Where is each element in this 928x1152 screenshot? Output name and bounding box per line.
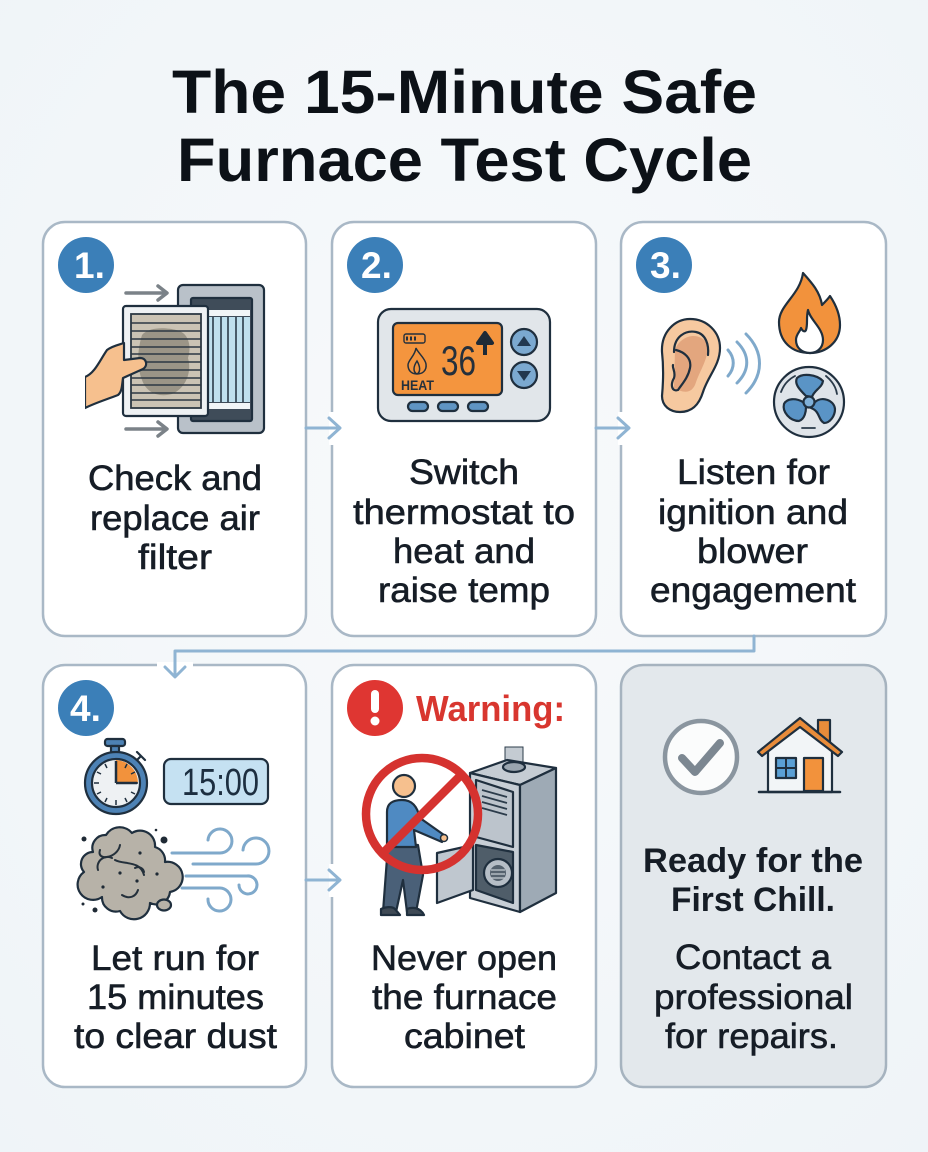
badge: step 1: 1.	[74, 245, 105, 286]
text: ready message	[643, 842, 863, 1056]
icon: house	[758, 718, 842, 792]
text: step 1: replace air	[90, 499, 260, 538]
badge: step 4: 4.	[70, 688, 101, 729]
badge: step 2: 2.	[361, 245, 392, 286]
title	[172, 58, 757, 194]
arrow: step 3 down to step 4	[157, 636, 754, 677]
text: step 1	[88, 459, 262, 577]
icon: ear and sound waves	[662, 319, 760, 412]
text: ready message: First Chill.	[671, 881, 835, 919]
text: step 3: ignition and	[658, 493, 848, 532]
icon: air filter being replaced	[81, 285, 264, 436]
icon: furnace with open door	[437, 747, 556, 912]
panel: step 2 thermostat	[332, 222, 596, 636]
text: step 1: Check and	[88, 459, 262, 498]
arrow: step 1 to step 2	[306, 412, 340, 445]
text: ready message: for repairs.	[665, 1017, 838, 1056]
text: ready message: Ready for the	[643, 842, 863, 880]
text: step 2: raise temp	[378, 571, 550, 610]
badge: step 3: 3.	[650, 245, 681, 286]
icon: thermostat	[378, 309, 550, 421]
icon: blower fan	[774, 367, 844, 437]
icon: stopwatch	[85, 739, 147, 814]
panel: warning	[332, 665, 596, 1087]
title: The 15-Minute Safe	[172, 58, 757, 126]
badge: step 2	[347, 237, 403, 293]
icon: flame	[779, 273, 840, 353]
text: step 4: Let run for	[91, 939, 259, 978]
text: step 3: Listen for	[677, 453, 830, 492]
text: step 4: 15 minutes	[87, 978, 264, 1017]
icon: prohibition sign	[366, 758, 478, 870]
panel: ready	[621, 665, 886, 1087]
badge: step 1	[58, 237, 114, 293]
panel: step 4 run	[43, 665, 306, 1087]
text: warning	[371, 939, 557, 1056]
heading: warning: Warning:	[416, 688, 565, 729]
title: Furnace Test Cycle	[177, 126, 752, 194]
icon: warning exclamation	[347, 680, 403, 736]
text: ready message: Contact a	[675, 938, 832, 977]
text: step 2	[353, 453, 575, 610]
text: step 3: blower	[697, 532, 808, 571]
text: step 2: Switch	[409, 453, 519, 492]
arrow: step 2 to step 3	[596, 412, 629, 445]
panel: step 3 listen	[621, 222, 886, 636]
text: step 4: to clear dust	[74, 1017, 277, 1056]
icon: dust cloud	[78, 827, 183, 919]
icon: thermostat: 36	[441, 337, 476, 384]
arrow: step 4 to warning	[306, 864, 340, 897]
text: step 1: filter	[138, 538, 212, 577]
badge: step 4	[58, 680, 114, 736]
text: step 3: engagement	[650, 571, 856, 610]
icon: wind lines	[172, 829, 269, 911]
panel: step 1 check filter	[43, 222, 306, 636]
text: ready message: professional	[654, 978, 853, 1017]
icon: digital timer 15:00: 15:00	[182, 762, 259, 804]
text: step 2: heat and	[393, 532, 535, 571]
text: warning: Never open	[371, 939, 557, 978]
text: warning: cabinet	[404, 1017, 525, 1056]
text: step 2: thermostat to	[353, 493, 575, 532]
icon: thermostat: HEAT	[401, 378, 435, 393]
icon: person	[381, 775, 448, 915]
text: step 4	[74, 939, 277, 1056]
badge: step 3	[636, 237, 692, 293]
text: warning: the furnace	[372, 978, 557, 1017]
icon: check mark	[665, 721, 737, 793]
text: step 3	[650, 453, 856, 610]
